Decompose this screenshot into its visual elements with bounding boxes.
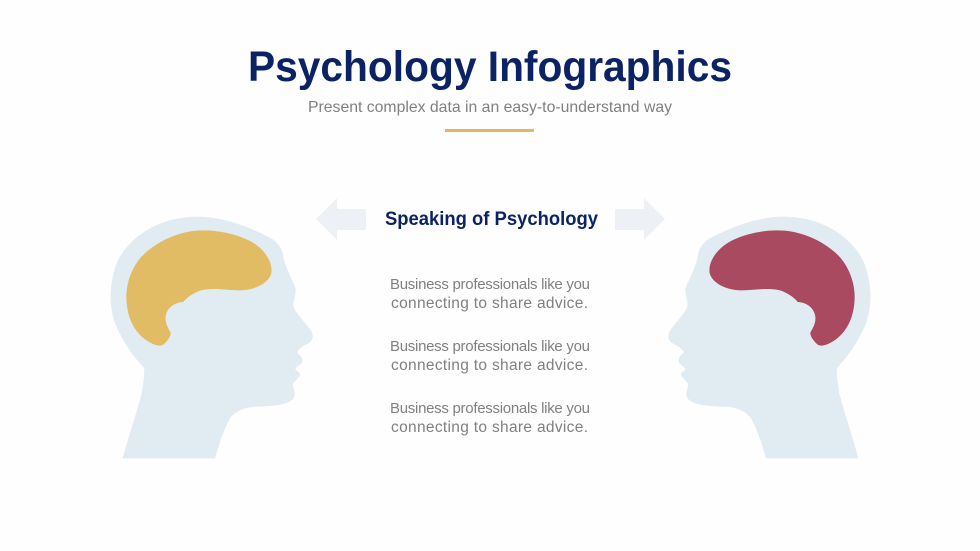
text block 1 (390, 276, 590, 312)
icon: right head with red brain (668, 217, 870, 458)
text block 3: connecting to share advice. (391, 419, 588, 436)
arrow: left (316, 198, 366, 240)
icon: left head with yellow brain (111, 217, 313, 458)
text block 2: Business professionals like you (390, 338, 590, 355)
heading: Speaking of Psychology: Speaking of Psychology (385, 208, 598, 230)
brain (126, 230, 272, 346)
brain (709, 230, 855, 346)
head silhouette (111, 217, 313, 458)
text block 3 (390, 400, 590, 436)
text block 1: connecting to share advice. (391, 295, 588, 312)
text block 2: connecting to share advice. (391, 357, 588, 374)
subtitle: Present complex data in an easy-to-understand way (308, 99, 672, 116)
arrow: right (615, 198, 665, 240)
title: Psychology Infographics (248, 43, 732, 91)
title accent rule (445, 129, 534, 132)
text block 2 (390, 338, 590, 374)
text block 1: Business professionals like you (390, 276, 590, 293)
text block 3: Business professionals like you (390, 400, 590, 417)
head silhouette (668, 217, 870, 458)
